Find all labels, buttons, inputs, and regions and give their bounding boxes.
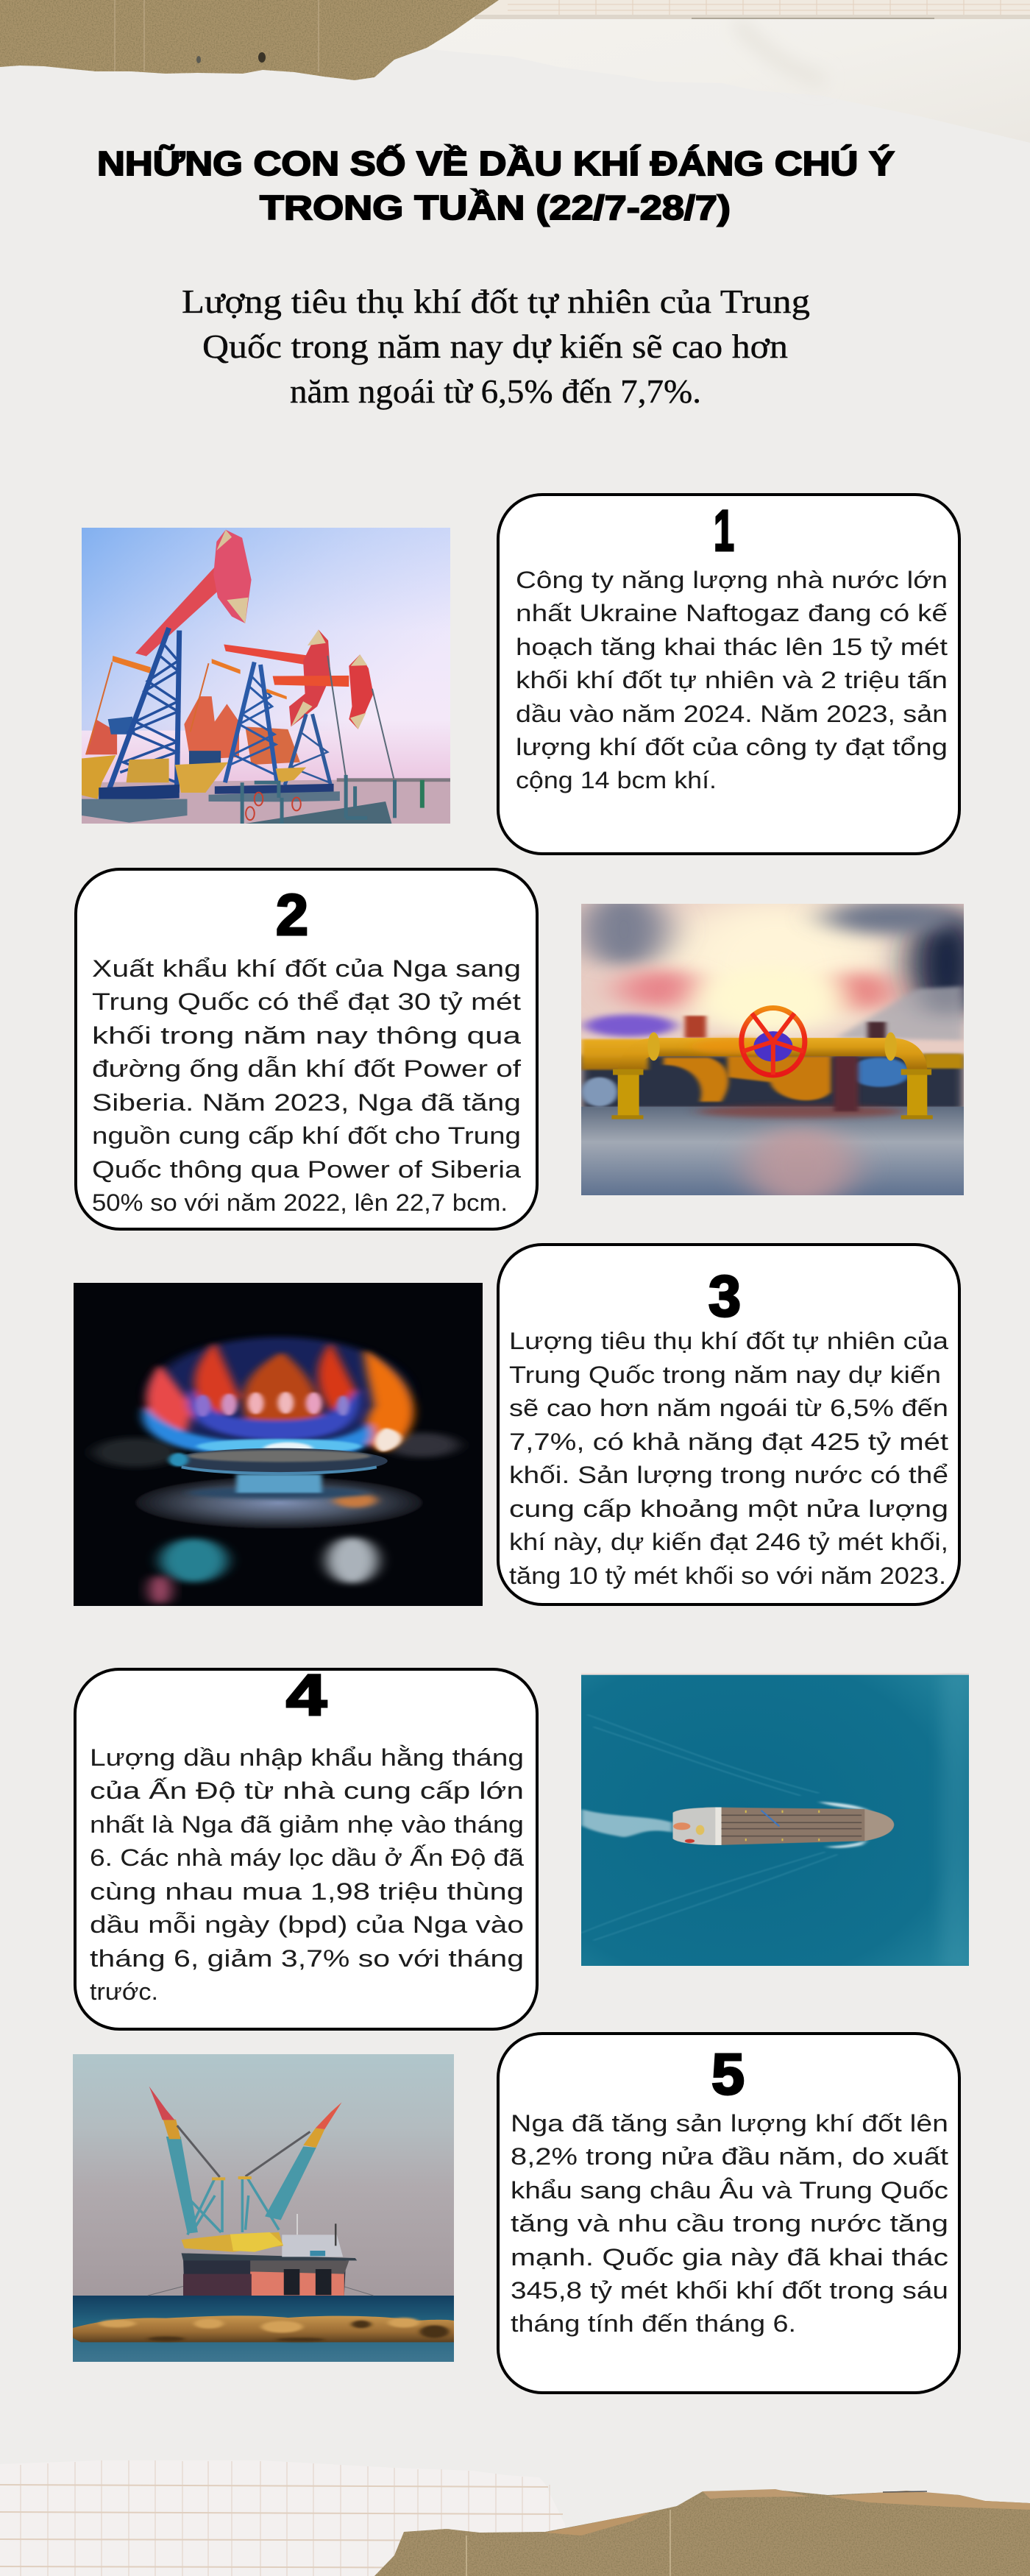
text block 2: đường ống dẫn khí đốt Power of — [92, 1055, 521, 1082]
subtitle: Lượng tiêu thụ khí đốt tự nhiên của Trung — [182, 283, 810, 320]
text block 1: nhất Ukraine Naftogaz đang có kế — [516, 600, 948, 626]
text block 1: dầu vào năm 2024. Năm 2023, sản — [516, 701, 948, 727]
text block 1: Công ty năng lượng nhà nước lớn — [516, 567, 948, 593]
text block 4: của Ấn Độ từ nhà cung cấp lớn — [90, 1777, 524, 1804]
text block 4: cùng nhau mua 1,98 triệu thùng — [90, 1878, 524, 1905]
text block 4: Lượng dầu nhập khẩu hằng tháng — [90, 1744, 524, 1771]
text block 1: khối khí đốt tự nhiên và 2 triệu tấn — [516, 667, 948, 693]
title: NHỮNG CON SỐ VỀ DẦU KHÍ ĐÁNG CHÚ Ý — [97, 144, 895, 183]
text block 2: nguồn cung cấp khí đốt cho Trung — [92, 1122, 521, 1149]
torn kraft paper, bottom right — [374, 2489, 1030, 2576]
title — [97, 144, 895, 227]
text block 3: tăng 10 tỷ mét khối so với năm 2023. — [509, 1563, 946, 1589]
text block 5: 345,8 tỷ mét khối khí đốt trong sáu — [511, 2277, 948, 2304]
text block 3: Trung Quốc trong năm nay dự kiến — [509, 1362, 941, 1388]
text block 5: khẩu sang châu Âu và Trung Quốc — [511, 2177, 948, 2204]
text block 5 — [511, 2110, 948, 2337]
text block 2: khối trong năm nay thông qua — [92, 1022, 521, 1049]
text block 3: khí này, dự kiến đạt 246 tỷ mét khối, — [509, 1529, 948, 1555]
panel: item 4 — [75, 1662, 537, 2029]
text block 3: cung cấp khoảng một nửa lượng — [509, 1496, 948, 1522]
title: TRONG TUẦN (22/7-28/7) — [260, 188, 731, 227]
number 1: 1 — [714, 498, 734, 563]
torn kraft paper, top left — [0, 0, 499, 80]
text block 5: tăng và nhu cầu trong nước tăng — [511, 2210, 948, 2237]
text block 5: tháng tính đến tháng 6. — [511, 2310, 796, 2337]
text block 1: hoạch tăng khai thác lên 15 tỷ mét — [516, 634, 948, 660]
text block 3: sẽ cao hơn năm ngoái từ 6,5% đến — [509, 1395, 948, 1421]
subtitle: năm ngoái từ 6,5% đến 7,7%. — [290, 372, 701, 410]
text block 4: nhất là Nga đã giảm nhẹ vào tháng — [90, 1811, 524, 1838]
text block 5: 8,2% trong nửa đầu năm, do xuất — [511, 2143, 948, 2170]
text block 2: Trung Quốc có thể đạt 30 tỷ mét — [92, 988, 521, 1015]
text block 2: 50% so với năm 2022, lên 22,7 bcm. — [92, 1189, 508, 1216]
number 5: 5 — [711, 2041, 745, 2106]
text block 2 — [92, 955, 521, 1216]
number 4: 4 — [286, 1662, 327, 1727]
text block 4: dầu mỗi ngày (bpd) của Nga vào — [90, 1911, 524, 1938]
text block 4 — [90, 1744, 524, 2005]
text block 2: Quốc thông qua Power of Siberia — [92, 1156, 521, 1183]
text block 2: Siberia. Năm 2023, Nga đã tăng — [92, 1089, 521, 1116]
photo: oil tanker from above — [581, 1673, 969, 1966]
text block 5: mạnh. Quốc gia này đã khai thác — [511, 2244, 948, 2271]
panel: item 1 — [498, 495, 959, 854]
panel: item 2 — [76, 869, 537, 1229]
panel: item 5 — [498, 2034, 959, 2393]
text block 3: 7,7%, có khả năng đạt 425 tỷ mét — [509, 1429, 948, 1455]
graph paper, bottom left — [0, 2460, 566, 2576]
text block 4: tháng 6, giảm 3,7% so với tháng — [90, 1945, 524, 1972]
number 2: 2 — [276, 882, 308, 947]
text block 1: cộng 14 bcm khí. — [516, 767, 717, 793]
subtitle: Quốc trong năm nay dự kiến sẽ cao hơn — [202, 328, 788, 365]
text block 3: Lượng tiêu thụ khí đốt tự nhiên của — [509, 1328, 948, 1354]
photo: offshore crane platform — [73, 2054, 454, 2362]
text block 4: 6. Các nhà máy lọc dầu ở Ấn Độ đã — [90, 1844, 524, 1871]
photo: gas burner flame — [74, 1283, 483, 1606]
text block 2: Xuất khẩu khí đốt của Nga sang — [92, 955, 521, 982]
subtitle — [182, 283, 810, 410]
text block 4: trước. — [90, 1978, 158, 2005]
number 3: 3 — [708, 1263, 741, 1328]
text block 3 — [509, 1328, 948, 1589]
torn white paper, top right — [423, 0, 1030, 143]
photo: gas pipeline valve — [581, 893, 983, 1205]
photo: oil pumpjacks — [82, 528, 450, 824]
text block 1 — [516, 567, 948, 793]
panel: item 3 — [498, 1245, 959, 1604]
text block 3: khối. Sản lượng trong nước có thể — [509, 1462, 948, 1488]
text block 5: Nga đã tăng sản lượng khí đốt lên — [511, 2110, 948, 2137]
text block 1: lượng khí đốt của công ty đạt tổng — [516, 734, 948, 760]
